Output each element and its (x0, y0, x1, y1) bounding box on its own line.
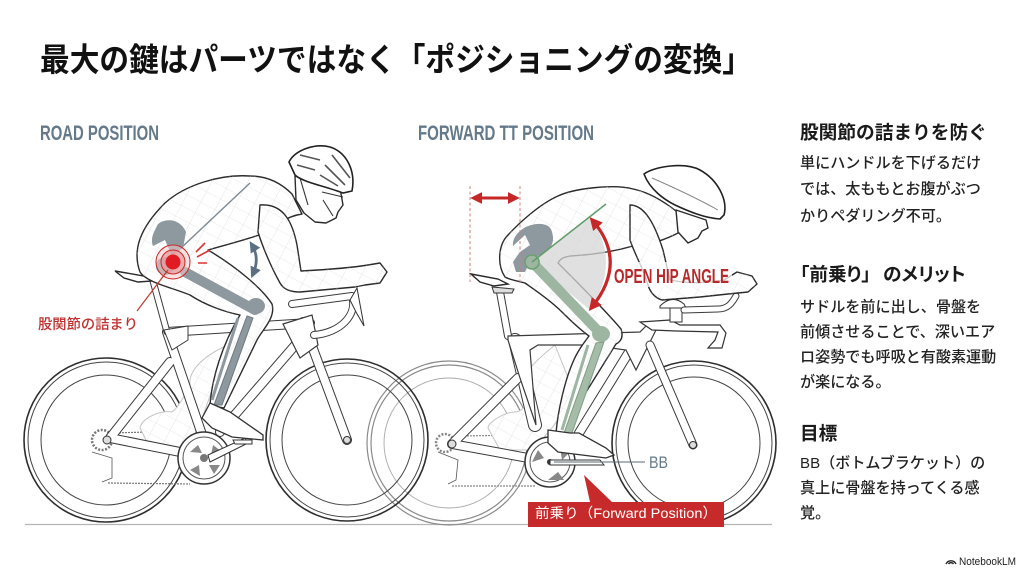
shin bone (214, 316, 253, 405)
callout: hip pinch (38, 243, 210, 333)
illustration: road bike wheels (24, 358, 428, 522)
arm (258, 205, 387, 292)
text block: forward merit: 前傾させることで、深いエア (800, 324, 995, 341)
frame thick head (164, 326, 188, 350)
text block: forward merit: が楽になる。 (800, 373, 891, 391)
handlebars (292, 296, 353, 335)
TT background leg (488, 345, 575, 450)
text block: target: 覚。 (800, 505, 830, 522)
illustration: road rider (137, 146, 387, 440)
helmet (289, 146, 353, 193)
callout: hip pinch: 股関節の詰まり (38, 315, 138, 333)
flexion arrow (252, 245, 256, 274)
TT arm (630, 205, 757, 300)
thigh bone (185, 272, 255, 310)
aerobars (640, 296, 736, 348)
shoe (202, 403, 263, 440)
callout: forward position (528, 475, 724, 527)
text block: hip pinch prevention: 単にハンドルを下げるだけ (800, 155, 981, 172)
head (295, 176, 343, 223)
text block: hip pinch prevention: かりペダリング不可。 (800, 207, 951, 225)
arrow: open hip angle (592, 221, 610, 307)
logo: NotebookLM: NotebookLM (959, 556, 1016, 568)
green trunk line (532, 204, 606, 262)
text block: forward merit (800, 264, 996, 391)
drivetrain (92, 430, 190, 484)
glasses and strap (300, 178, 343, 216)
text block: target: 目標 (800, 423, 838, 444)
saddle (115, 271, 152, 282)
illustration: road bike (92, 271, 364, 484)
text block: forward merit: 「前乗り」 (800, 264, 871, 285)
TT saddle (471, 274, 508, 286)
illustration: TT bike (436, 274, 736, 487)
crankset (178, 432, 252, 484)
label: BB (554, 453, 668, 472)
knee (247, 298, 265, 314)
text block: hip pinch prevention: では、太ももとお腹がぶつ (800, 180, 981, 198)
ground line (25, 524, 772, 526)
forward offset marker (470, 186, 520, 282)
heading: road position: ROAD POSITION (40, 122, 159, 145)
green shin (564, 342, 604, 433)
label: BB: BB (649, 453, 668, 472)
text block: hip pinch prevention (800, 122, 987, 225)
text block: target: 真上に骨盤を持ってくる感 (800, 479, 980, 497)
TT pelvis (513, 224, 553, 272)
illustration: TT bike wheels (367, 361, 776, 525)
text block: target (800, 423, 985, 522)
label: open hip angle (612, 262, 732, 288)
heading: forward TT position: FORWARD TT POSITION (418, 122, 594, 145)
TT helmet (644, 166, 725, 219)
illustration: TT rider (500, 166, 757, 458)
text block: target: BB（ボトムブラケット）の (800, 454, 985, 472)
text block: hip pinch prevention: 股関節の詰まりを防ぐ (800, 122, 987, 143)
TT head (676, 210, 708, 243)
green femur (532, 262, 601, 334)
label: open hip angle: OPEN HIP ANGLE (614, 266, 729, 288)
TT crankset (525, 437, 604, 487)
open angle wedge (532, 217, 606, 310)
text block: forward merit: のメリット (883, 264, 966, 285)
text block: forward merit: サドルを前に出し、骨盤を (800, 299, 981, 316)
spine line (181, 183, 250, 248)
TT shoe (548, 430, 614, 458)
callout: forward position: 前乗り（Forward Position） (535, 505, 717, 522)
TT drivetrain (436, 434, 535, 486)
title: 最大の鍵はパーツではなく「ポジショニングの変換」 (40, 42, 752, 78)
text block: forward merit: ロ姿勢でも呼吸と有酸素運動 (800, 349, 996, 366)
pelvis (152, 220, 186, 256)
background leg (140, 345, 228, 452)
